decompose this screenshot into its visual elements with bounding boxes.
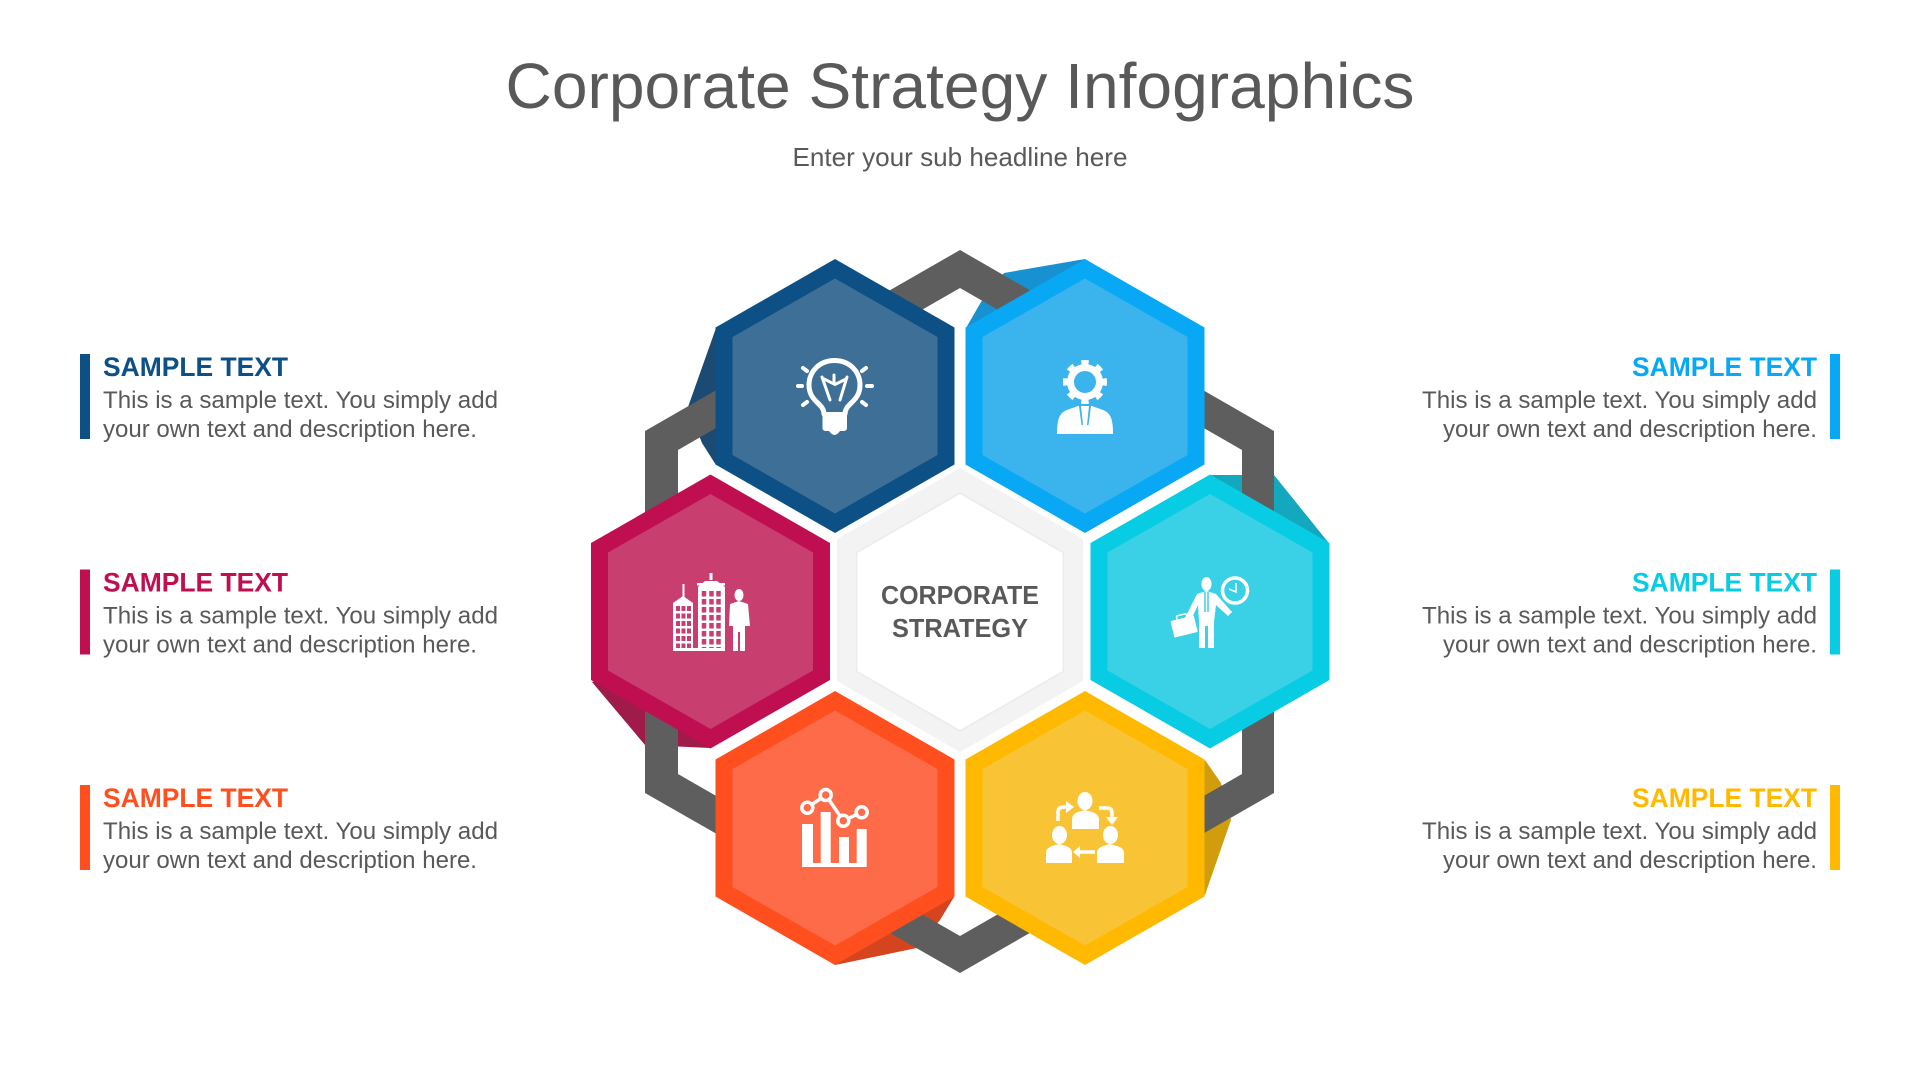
left text block: orange: your own text and description here. <box>103 847 477 874</box>
left text block: crimson: SAMPLE TEXT <box>103 568 288 598</box>
right text block: light blue <box>1422 352 1840 443</box>
fold shadows behind hexagons <box>592 259 1328 965</box>
left text block: orange: This is a sample text. You simply add <box>103 818 498 845</box>
hexagon diagram <box>591 250 1330 973</box>
right text block: cyan: your own text and description here. <box>1443 632 1817 658</box>
hexagon: yellow <box>966 691 1204 965</box>
hexagon: center: STRATEGY <box>892 613 1028 643</box>
icon: businessman with clock and briefcase <box>1170 577 1248 648</box>
right text block: cyan: This is a sample text. You simply add <box>1422 602 1817 630</box>
right text block: cyan: SAMPLE TEXT <box>1632 568 1817 598</box>
title: Corporate Strategy Infographics <box>506 50 1414 122</box>
left text block: crimson: your own text and description here. <box>103 632 477 658</box>
hexagon: crimson <box>591 474 830 748</box>
hexagon: cyan <box>1090 474 1330 748</box>
subtitle: Enter your sub headline here <box>792 142 1128 172</box>
icon: light bulb <box>798 360 872 435</box>
hexagon: light blue <box>966 259 1204 533</box>
right text block: light blue: SAMPLE TEXT <box>1632 352 1817 382</box>
hexagon: orange <box>716 691 954 965</box>
hexagon: center <box>837 468 1083 752</box>
right text block: light blue: This is a sample text. You simply add <box>1422 387 1817 414</box>
icon: office buildings and man <box>673 573 750 651</box>
hexagon: center: CORPORATE <box>881 580 1039 610</box>
left text block: dark blue: This is a sample text. You simply add <box>103 387 498 414</box>
left text block: dark blue: your own text and description here. <box>103 416 477 443</box>
left text block: orange: SAMPLE TEXT <box>103 783 288 813</box>
right text block: cyan <box>1422 568 1840 658</box>
left text block: crimson: This is a sample text. You simply add <box>103 602 498 630</box>
gray connector ring <box>645 250 1274 973</box>
icon: bar chart with line <box>802 790 867 867</box>
right text block: yellow: your own text and description here. <box>1443 847 1817 874</box>
right text block: yellow <box>1422 783 1840 874</box>
icon: gear head businessman <box>1057 363 1113 434</box>
right text block: light blue: your own text and description here. <box>1443 416 1817 443</box>
right text block: yellow: This is a sample text. You simply add <box>1422 818 1817 845</box>
left text block: dark blue <box>80 352 498 443</box>
hexagon: dark blue <box>716 259 954 533</box>
left text block: dark blue: SAMPLE TEXT <box>103 352 288 382</box>
left text block: orange <box>80 783 498 874</box>
right text block: yellow: SAMPLE TEXT <box>1632 783 1817 813</box>
icon: team cycle <box>1046 792 1124 863</box>
left text block: crimson <box>80 568 498 658</box>
